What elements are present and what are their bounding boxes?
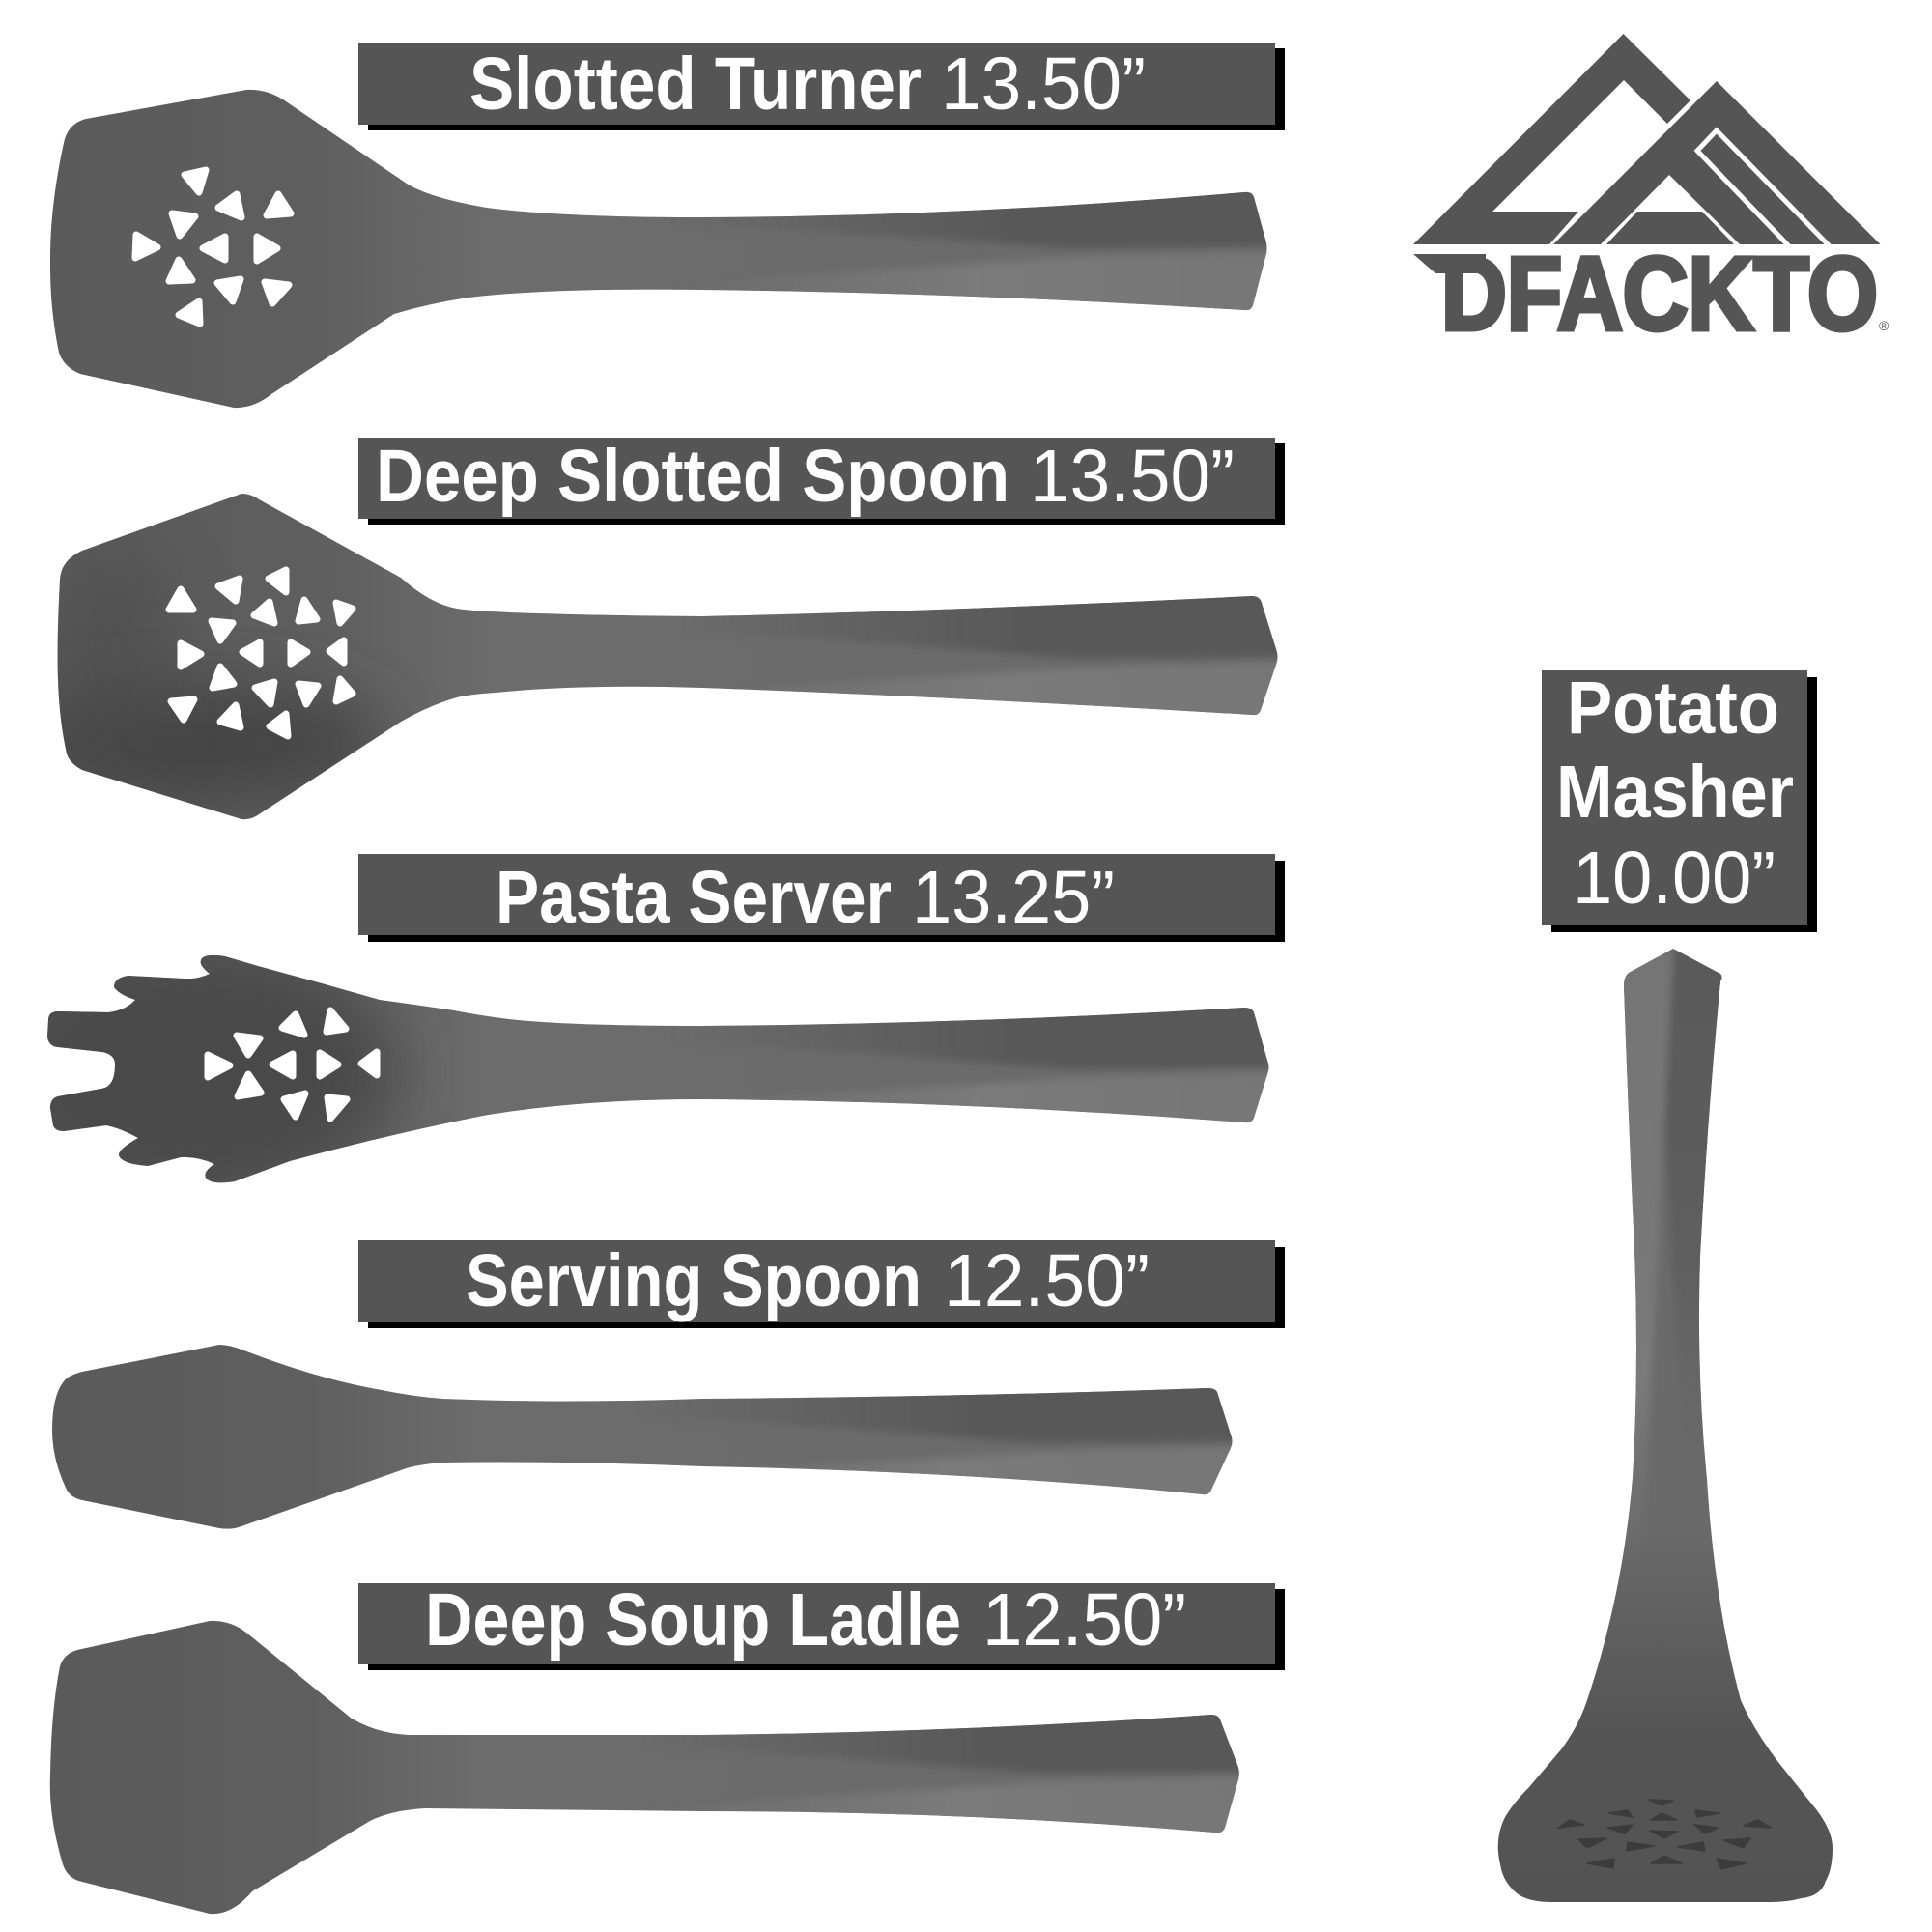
logo: DFACKTO mountains wordmark [1413,34,1889,352]
banner: Potato Masher 10.00 [1542,667,1817,932]
slot holes: turner [135,170,291,324]
banner: Pasta Server 13.25 [358,854,1285,942]
utensil: deep soup ladle [50,1621,1254,1914]
utensil: serving spoon [52,1345,1247,1529]
banner: Serving Spoon 12.50: 12.50” [944,1239,1150,1322]
banner: Deep Slotted Spoon 13.50: Deep Slotted Spoon [376,435,1009,518]
banner: Pasta Server 13.25: 13.25” [912,856,1115,939]
dimples: masher holes [1558,1800,1771,1869]
slot holes: pasta server [208,1010,377,1119]
logo icon: right mountain [1553,81,1880,246]
banner: Serving Spoon 12.50: Serving Spoon [466,1239,922,1322]
banner: Deep Slotted Spoon 13.50: 13.50” [1030,435,1235,518]
banner: Deep Soup Ladle 12.50: Deep Soup Ladle [425,1578,961,1662]
utensil: slotted turner [50,90,1282,408]
utensil: potato masher [1498,942,1833,1902]
banner: Potato Masher 10.00: Masher [1556,751,1794,834]
logo icon: left mountain [1413,34,1690,244]
banner: Slotted Turner 13.50: 13.50” [941,43,1146,126]
banner: Slotted Turner 13.50 [358,43,1285,130]
utensil: deep slotted spoon [19,494,1293,819]
banner: Pasta Server 13.25: Pasta Server [496,856,892,939]
logo wordmark: DFACKTO [1441,235,1878,352]
banner: Serving Spoon 12.50 [358,1239,1285,1328]
banner: Deep Soup Ladle 12.50: 12.50” [982,1578,1186,1662]
banner: Slotted Turner 13.50: Slotted Turner [469,43,922,126]
banner: Potato Masher 10.00: 10.00” [1573,837,1776,920]
banner: Potato Masher 10.00: Potato [1567,667,1779,750]
logo wordmark: ® [1879,318,1889,333]
utensil: pasta server [47,954,1269,1182]
slot holes: deep slotted spoon [169,570,353,736]
banner: Deep Soup Ladle 12.50 [358,1578,1285,1670]
